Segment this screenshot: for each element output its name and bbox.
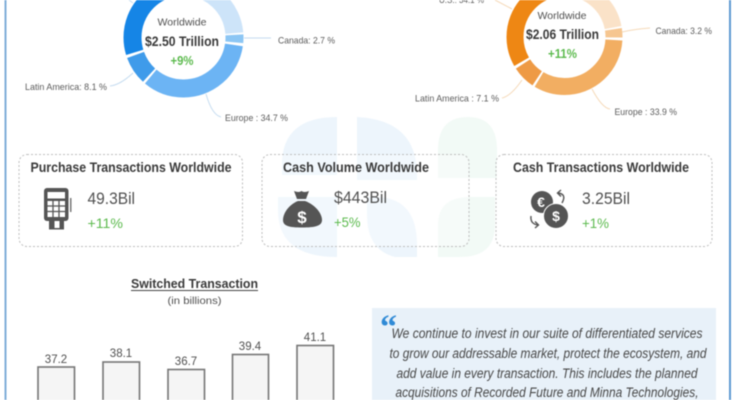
donut chart: purchase volume: [25, 0, 335, 124]
donut centre text: $2.50 Trillion: [145, 34, 219, 49]
bar values: 36.7: [175, 356, 197, 368]
donut centre text: Worldwide: [158, 16, 207, 28]
bar values: [45, 332, 326, 368]
callout: Latin America: [415, 80, 522, 104]
value: $443Bil: [334, 188, 387, 207]
change: +5%: [334, 214, 360, 230]
icon: money bag: $: [297, 208, 307, 227]
chart subtitle: (in billions): [168, 295, 222, 307]
panel: cash transactions: [496, 154, 712, 246]
icon: money bag: [283, 191, 322, 228]
callout: Latin America: [25, 73, 133, 93]
panel: purchase transactions: [19, 154, 242, 246]
donut centre text: [145, 16, 219, 68]
bar values: 38.1: [110, 348, 132, 360]
callout: Europe: [206, 94, 288, 124]
quote text: [390, 326, 707, 400]
panel: cash volume: [262, 154, 469, 246]
callout: Europe: Europe : 34.7 %: [225, 113, 288, 124]
callout: Europe: [592, 89, 677, 118]
value: 49.3Bil: [88, 189, 135, 208]
donut centre text: +11%: [548, 47, 577, 61]
value: 3.25Bil: [582, 189, 630, 208]
callout: Latin America: Latin America : 7.1 %: [415, 94, 500, 104]
callout: Canada: Canada: 2.7 %: [278, 36, 335, 46]
quote text: add value in every transaction. This includes the planned: [396, 366, 698, 381]
panel: quote: [372, 308, 716, 400]
quote mark: “: [380, 309, 397, 346]
donut centre text: [526, 10, 599, 61]
donut ring: blue segments: [132, 0, 234, 88]
heading: Cash Transactions Worldwide: [513, 159, 689, 175]
change: +1%: [582, 215, 609, 231]
change: +11%: [88, 215, 123, 231]
icon: card terminal: [44, 188, 72, 230]
quote text: acquisitions of Recorded Future and Minna Technologies,: [396, 385, 698, 400]
donut ring: orange segments: [515, 0, 614, 86]
callout: U.S.: [439, 0, 512, 9]
quote text: We continue to invest in our suite of differentiated services: [392, 326, 703, 341]
bar values: 41.1: [304, 332, 326, 344]
callout: Canada: [244, 36, 335, 46]
bar values: 37.2: [45, 354, 67, 366]
callout: Europe: Europe : 33.9 %: [614, 107, 677, 118]
donut centre text: +9%: [170, 54, 194, 68]
callout: Canada: [622, 26, 712, 37]
callout: Canada: Canada: 3.2 %: [656, 26, 712, 37]
bar chart: switched transaction: [38, 276, 334, 400]
donut chart: cash volume: [415, 0, 712, 118]
icon: currency exchange: €: [537, 194, 545, 210]
icon: currency exchange: [531, 190, 568, 228]
chart title: Switched Transaction: [131, 276, 258, 291]
heading: Cash Volume Worldwide: [283, 159, 429, 175]
watermark logo: [278, 117, 497, 257]
bar values: 39.4: [239, 341, 262, 353]
bars: [38, 346, 334, 400]
donut centre text: Worldwide: [538, 10, 587, 22]
donut centre text: $2.06 Trillion: [526, 27, 599, 42]
heading: Purchase Transactions Worldwide: [30, 159, 232, 175]
icon: currency exchange: $: [552, 208, 560, 224]
callout: Latin America: Latin America: 8.1 %: [25, 82, 108, 93]
